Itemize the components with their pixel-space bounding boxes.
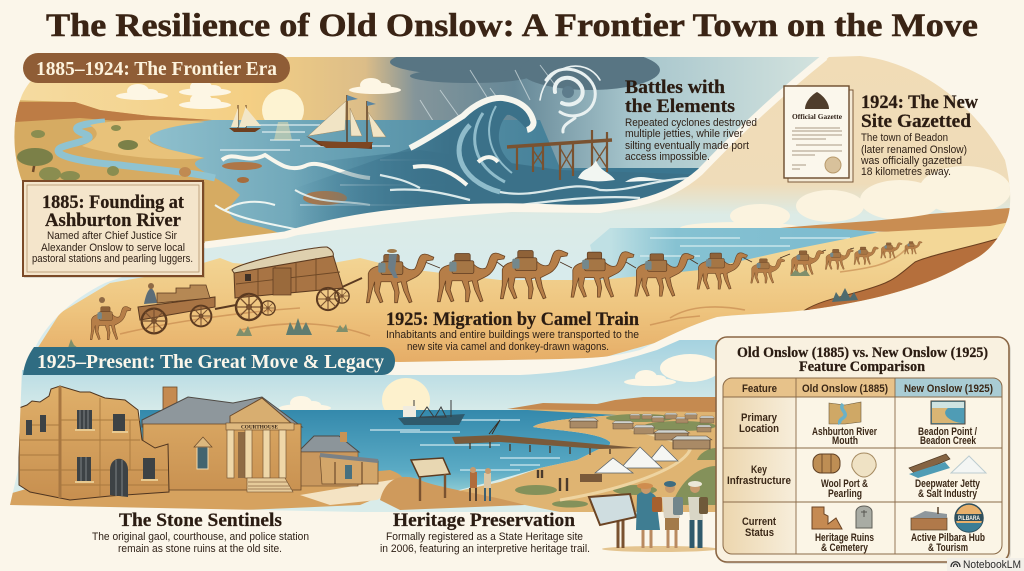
distant sea bbox=[590, 228, 890, 282]
comparison table grid bbox=[723, 378, 1002, 554]
camel rider bbox=[388, 254, 398, 278]
watermark: NotebookLM: NotebookLM bbox=[963, 559, 1021, 571]
tourists reading a heritage board bbox=[589, 481, 718, 552]
tourist in white hat bbox=[688, 481, 708, 548]
text block: 1924 the new site gazetted: Site Gazetted bbox=[861, 112, 972, 132]
row: key infrastructure bbox=[727, 453, 986, 500]
courthouse: COURTHOUSE bbox=[241, 424, 278, 430]
jetty spray bbox=[578, 160, 670, 182]
tourist with grey pack bbox=[662, 481, 683, 548]
row: primary location: Beadon Point / bbox=[918, 426, 977, 438]
covered wagon bbox=[232, 247, 362, 320]
text block: the stone sentinels: The Stone Sentinels bbox=[119, 510, 282, 531]
far town land bbox=[460, 409, 716, 512]
camel rider hat bbox=[387, 249, 397, 253]
text block: 1925 migration by camel train bbox=[386, 309, 639, 353]
rain bbox=[420, 64, 554, 120]
couple viewing the coast bbox=[470, 467, 491, 501]
row: key infrastructure: & Salt Industry bbox=[918, 488, 978, 500]
storm clouds bbox=[390, 57, 660, 90]
brown headland bbox=[12, 102, 212, 122]
deep water foreground bbox=[300, 152, 612, 220]
table title bbox=[737, 345, 988, 375]
table title: Old Onslow (1885) vs. New Onslow (1925) bbox=[737, 345, 988, 361]
icon: deepwater jetty bbox=[909, 454, 950, 478]
heritage board bbox=[589, 494, 636, 548]
cyclone swirl bbox=[540, 66, 600, 132]
row: current status bbox=[742, 504, 985, 554]
panel: great move and legacy scene bbox=[0, 340, 720, 520]
callout: 1885 founding at Ashburton River: 1885: Founding at bbox=[42, 193, 185, 213]
camel train bbox=[366, 241, 922, 303]
distant headland bbox=[780, 208, 1010, 240]
panel: migration band with desert and gazette background bbox=[0, 50, 1024, 370]
river bbox=[58, 122, 215, 178]
icon: river map bbox=[829, 402, 861, 424]
text block: heritage preservation: in 2006, featuring an interpretive heritage trail. bbox=[380, 543, 590, 555]
icon: pearl shell bbox=[852, 453, 876, 477]
header row: Feature bbox=[742, 383, 777, 395]
sky clouds bbox=[279, 354, 716, 410]
text block: battles with the elements bbox=[625, 78, 757, 163]
icon: tourism badge bbox=[955, 504, 983, 532]
callout: 1885 founding at Ashburton River: Named after Chief Justice Sir bbox=[47, 230, 177, 242]
text block: battles with the elements: access impossible. bbox=[625, 151, 710, 163]
interpretive sign on mound bbox=[411, 458, 450, 501]
row: current status: Status bbox=[745, 527, 774, 539]
cream band below frontier panel bbox=[205, 57, 825, 245]
beach walkers and hut bbox=[538, 470, 602, 491]
sand dunes and ground bbox=[30, 222, 1010, 370]
section pill: frontier era: 1885–1924: The Frontier Era bbox=[36, 58, 277, 80]
text block: the stone sentinels: The original gaol, courthouse, and police station bbox=[92, 531, 309, 543]
row: primary location: Ashburton River bbox=[812, 426, 878, 438]
ruins ground bbox=[5, 470, 403, 512]
icon: gravestone bbox=[856, 506, 872, 528]
sea bbox=[150, 120, 699, 243]
header row: New Onslow (1925) bbox=[904, 383, 993, 395]
setting sun bbox=[262, 89, 304, 120]
row: key infrastructure: Deepwater Jetty bbox=[915, 478, 981, 490]
police station bbox=[298, 432, 378, 486]
text block: the stone sentinels bbox=[92, 510, 309, 555]
giant breaking wave bbox=[298, 94, 688, 220]
rocks and breaking surf bbox=[215, 155, 370, 235]
coastal trees and scrub bbox=[17, 125, 191, 181]
harbour sea bbox=[140, 410, 640, 495]
flatbed donkey wagon with cargo bbox=[138, 283, 236, 333]
text block: heritage preservation: Formally registered as a State Heritage site bbox=[386, 531, 583, 543]
callout: 1885 founding at Ashburton River: Ashburton River bbox=[45, 211, 181, 231]
icon: beadon point scene bbox=[931, 401, 965, 424]
section pill: great move and legacy: 1925–Present: The Great Move & Legacy bbox=[37, 351, 384, 373]
row: key infrastructure: Key bbox=[751, 464, 768, 476]
tourist in blue dress bbox=[636, 483, 662, 548]
callout: 1885 founding at Ashburton River: pastoral stations and pearling luggers. bbox=[32, 253, 193, 265]
row: primary location: Mouth bbox=[832, 435, 858, 447]
road bbox=[560, 425, 690, 500]
text block: battles with the elements: silting eventually made port bbox=[625, 140, 749, 152]
row: key infrastructure: Wool Port & bbox=[821, 478, 868, 490]
text block: battles with the elements: multiple jetties, while river bbox=[625, 128, 743, 140]
left coast land bbox=[10, 100, 285, 250]
header row: Old Onslow (1885) bbox=[802, 383, 888, 395]
icon: tourism badge: PILBARA bbox=[958, 516, 981, 522]
text block: heritage preservation bbox=[380, 510, 590, 555]
title: The Resilience of Old Onslow: A Frontier Town on the Move bbox=[46, 8, 978, 44]
text block: 1925 migration by camel train: new site via camel and donkey-drawn wagons. bbox=[407, 341, 609, 353]
cargo ship bbox=[398, 400, 465, 425]
text block: 1924 the new site gazetted bbox=[860, 93, 979, 178]
text block: 1924 the new site gazetted: was officially gazetted bbox=[860, 155, 962, 167]
pale path bbox=[300, 479, 395, 505]
row: current status: Active Pilbara Hub bbox=[911, 532, 985, 544]
far town buildings bbox=[569, 413, 715, 449]
text block: battles with the elements: Repeated cyclones destroyed bbox=[625, 117, 757, 129]
icon: salt pile bbox=[951, 456, 986, 473]
cliff in the foreground bbox=[805, 238, 1000, 312]
row: key infrastructure: Infrastructure bbox=[727, 475, 791, 487]
text block: the stone sentinels: remain as stone ruins at the old site. bbox=[118, 543, 282, 555]
sign mound bbox=[380, 477, 525, 510]
deepwater jetty bbox=[452, 420, 640, 455]
text block: 1924 the new site gazetted: The town of Beadon bbox=[861, 132, 948, 144]
text block: battles with the elements: the Elements bbox=[625, 97, 735, 117]
lead camel on foot with rider bbox=[90, 297, 131, 340]
text block: 1924 the new site gazetted: 18 kilometres away. bbox=[861, 166, 951, 178]
icon: official gazette document: Official Gazette bbox=[792, 112, 843, 121]
row: current status: & Tourism bbox=[928, 542, 968, 554]
far coast hills bbox=[507, 397, 716, 412]
icon: heritage ruins bbox=[812, 507, 842, 529]
text block: 1925 migration by camel train: Inhabitants and entire buildings were transported to the bbox=[386, 329, 639, 341]
olive scrub on the land bbox=[515, 414, 716, 508]
small sailing ship bbox=[229, 105, 261, 132]
section pill: frontier era bbox=[23, 53, 290, 83]
callout: 1885 founding at Ashburton River: Alexander Onslow to serve local bbox=[41, 242, 185, 254]
courthouse bbox=[142, 387, 302, 492]
header row bbox=[742, 383, 993, 395]
text block: 1924 the new site gazetted: 1924: The New bbox=[861, 93, 979, 113]
panel: comparison table card bbox=[716, 337, 1011, 564]
row: primary location: Beadon Creek bbox=[920, 435, 977, 447]
text block: battles with the elements: Battles with bbox=[625, 78, 726, 98]
row: current status: Current bbox=[742, 516, 776, 528]
ruined gaol bbox=[19, 386, 169, 500]
row: primary location bbox=[739, 401, 977, 447]
ground strip bbox=[602, 546, 718, 552]
icon: official gazette document bbox=[784, 86, 853, 182]
text block: 1925 migration by camel train: 1925: Migration by Camel Train bbox=[386, 309, 639, 330]
text block: 1924 the new site gazetted: (later renamed Onslow) bbox=[861, 144, 967, 156]
damaged jetty bbox=[507, 130, 612, 180]
panel: frontier era coast and storm scene bbox=[14, 57, 820, 243]
desert scrub bbox=[68, 270, 858, 348]
row: primary location: Primary bbox=[741, 412, 778, 424]
row: primary location: Location bbox=[739, 423, 779, 435]
peninsula sand bbox=[82, 120, 205, 159]
row: key infrastructure: Pearling bbox=[828, 488, 862, 500]
row: current status: & Cemetery bbox=[821, 542, 869, 554]
row: current status: Heritage Ruins bbox=[815, 532, 874, 544]
fair weather clouds bbox=[116, 78, 401, 109]
salt stockpiles bbox=[595, 445, 678, 473]
callout: 1885 founding at Ashburton River bbox=[23, 181, 205, 278]
large sailing ship bbox=[306, 95, 386, 149]
clouds behind the coast bbox=[680, 166, 1011, 234]
icon: town hub bbox=[911, 507, 947, 530]
table title: Feature Comparison bbox=[799, 359, 925, 375]
text block: heritage preservation: Heritage Preservation bbox=[393, 510, 575, 531]
icon: wool bale bbox=[813, 454, 840, 473]
